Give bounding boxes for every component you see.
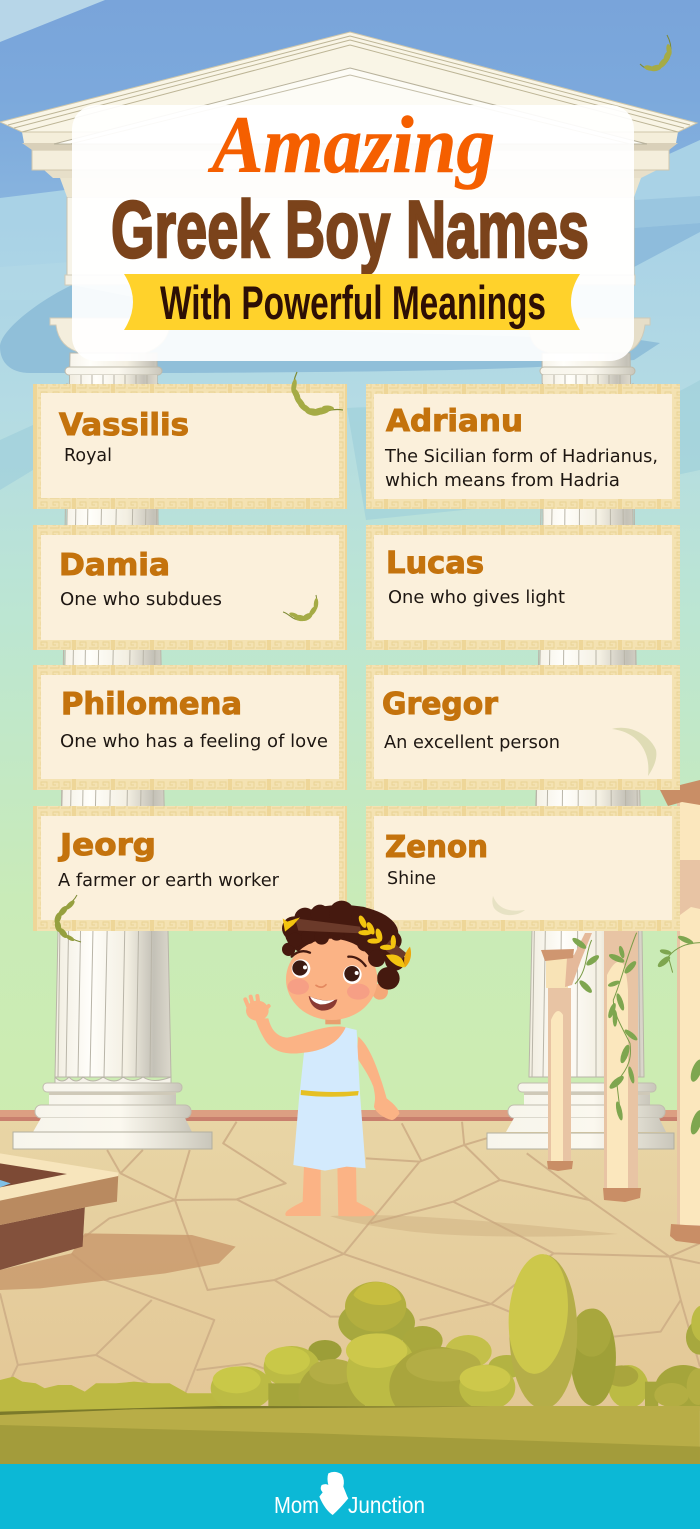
card frame [33, 665, 347, 790]
card frame [33, 384, 347, 509]
card frame [366, 665, 680, 790]
eyes [292, 959, 362, 984]
title backing panel [72, 105, 634, 361]
neck [325, 1015, 341, 1024]
meaning: One who subdues [60, 590, 222, 610]
vines [571, 933, 700, 1136]
name: Gregor [382, 687, 498, 722]
card: Philomena [33, 665, 347, 790]
pediment [0, 32, 697, 144]
card frame [366, 806, 680, 931]
broken pillars [541, 780, 700, 1244]
basin body [0, 1207, 85, 1270]
logo wordmark: Mom [274, 1492, 319, 1518]
laurel wreath [283, 914, 411, 967]
stone floor [0, 1121, 700, 1411]
fringe [283, 926, 385, 967]
mouth [309, 996, 337, 1011]
sky swooshes [0, 0, 700, 520]
pillar three [660, 780, 700, 1244]
bushes [211, 1252, 700, 1427]
meaning: An excellent person [384, 733, 560, 753]
pillar one [541, 933, 592, 1171]
subtitle banner [124, 274, 580, 330]
footer bar [0, 1464, 700, 1529]
card: Vassilis [33, 372, 347, 509]
eyebrows [292, 951, 366, 966]
card: Zenon [366, 806, 680, 931]
capitals [50, 318, 650, 384]
card frame [33, 525, 347, 650]
card: Damia [33, 525, 347, 650]
name: Adrianu [386, 404, 523, 439]
cheeks [288, 979, 370, 1000]
card: Gregor [366, 665, 680, 790]
belt [301, 1090, 359, 1097]
grass foreground [0, 1406, 700, 1464]
floor cracks [0, 1122, 700, 1393]
entablature [22, 132, 678, 285]
icon: faded leaf [492, 896, 525, 915]
meaning: One who has a feeling of love [60, 732, 328, 752]
legs [285, 1165, 375, 1216]
left hedge [0, 1377, 232, 1412]
card frame [33, 806, 347, 931]
ear [372, 984, 388, 1000]
meaning: A farmer or earth worker [58, 871, 280, 891]
logo: MomJunction [274, 1472, 425, 1518]
nose [316, 985, 326, 987]
icon: leaf top right [640, 35, 673, 72]
sky and green background [0, 0, 700, 1125]
logo figure [319, 1472, 348, 1515]
title: Amazing: Amazing [207, 99, 495, 190]
logo: MomJunction: Junction [348, 1492, 425, 1518]
meaning: Royal [64, 446, 112, 466]
basin shadow [0, 1233, 236, 1290]
column: right [487, 353, 674, 1149]
card frame [366, 525, 680, 650]
right arm [357, 1037, 399, 1120]
round topiary [338, 1282, 415, 1347]
card: Jeorg [33, 806, 347, 931]
column: left [13, 353, 212, 1149]
name: Damia [59, 548, 170, 583]
meaning: One who gives light [388, 588, 565, 608]
name: Zenon [385, 830, 488, 865]
icon: leaf sprig [283, 595, 319, 623]
water basin [0, 1153, 236, 1290]
name: Jeorg [58, 828, 156, 863]
temple [0, 32, 697, 1149]
pillar two [603, 931, 641, 1202]
bush cluster [211, 1252, 700, 1427]
raised arm [245, 996, 346, 1054]
meaning: Shine [387, 869, 436, 889]
meaning: The Sicilian form of Hadrianus, [384, 447, 658, 467]
card frame [366, 384, 680, 509]
boundary wall [0, 1110, 700, 1122]
card: Lucas [366, 525, 680, 650]
name: Lucas [386, 546, 484, 581]
headband [295, 918, 362, 933]
tunic [293, 1027, 366, 1171]
icon: leaf on Jeorg card [53, 895, 81, 942]
name: Vassilis [59, 408, 189, 443]
boy character [245, 901, 411, 1216]
card: Adrianu: which means from Hadria [385, 471, 620, 491]
icon: faded leaf [612, 728, 656, 776]
card: Adrianu [366, 384, 680, 509]
name: Philomena [61, 687, 242, 722]
subtitle text: With Powerful Meanings [160, 276, 546, 329]
icon: leaf sprig [290, 372, 343, 417]
face [286, 939, 377, 1020]
boy shadow [330, 1215, 618, 1237]
hair [282, 901, 405, 990]
